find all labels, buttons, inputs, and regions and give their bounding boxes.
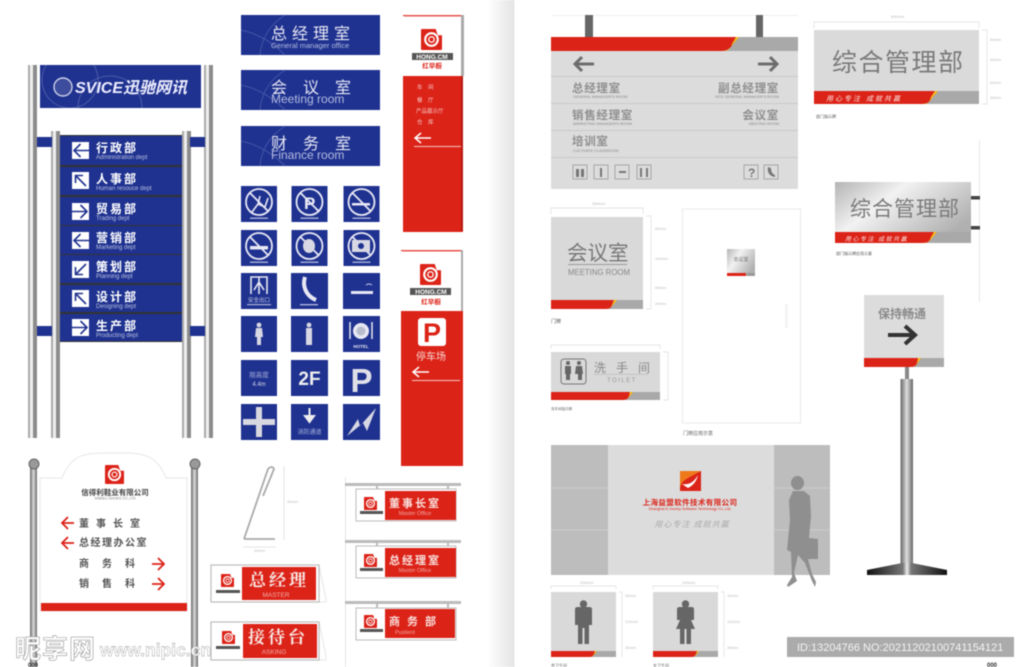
- icon: hotel: [343, 316, 380, 352]
- icon: man: [575, 600, 592, 644]
- band: [551, 300, 643, 309]
- plaque: 会议室: Meeting room: [271, 92, 344, 106]
- logo: [105, 465, 124, 484]
- panel: blue pictogram grid: [241, 186, 380, 440]
- panel: door sign 会议室 with dimensions: MEETING ROOM: [568, 268, 630, 277]
- directory lines: 总经理办公室: [79, 536, 148, 549]
- panel: reception wall: [551, 445, 830, 587]
- panel: table sign 总经理: 总经理: [249, 571, 309, 590]
- panel: toilet sign: 洗手间: [594, 361, 660, 375]
- icon: emergency exit: 安全出口: [248, 296, 270, 304]
- panel: overhead directory sign: ?: [748, 166, 755, 180]
- watermark: image ID label: ID:13204766 NO:20211202100741154121: [797, 642, 1003, 654]
- panel: overhead directory sign: MEETING ROOM: [749, 122, 779, 126]
- directory lines: [79, 517, 148, 590]
- plaque: 财务室: [241, 126, 380, 166]
- totem directory text: 仓 库: [417, 118, 434, 126]
- panel: toilet sign: [551, 345, 668, 411]
- icon: male toilet: [291, 316, 328, 352]
- company name: 上海益盟软件技术有限公司: [643, 497, 737, 507]
- band: [864, 358, 944, 367]
- panel: red totem with directory: HONG.CM: [416, 54, 448, 61]
- arrows: [575, 57, 777, 71]
- plaque: 会议室: 会议室: [271, 79, 367, 97]
- row: 行政部: 行政部: [96, 140, 138, 155]
- icon: no parking: P: [304, 194, 315, 213]
- plaque: 财务室: 财务室: [271, 135, 367, 153]
- row: 贸易部: 贸易部: [96, 201, 138, 216]
- diagram: A-frame table sign profile: [243, 466, 299, 553]
- top banner: SVICE logo: SVICE迅驰网讯: [75, 79, 188, 97]
- company logo: [680, 471, 701, 491]
- silhouette: woman with briefcase: [787, 476, 818, 587]
- arrow: [888, 326, 915, 344]
- panel: male toilet door sign: 30mm: [625, 645, 637, 650]
- panel: door sign 会议室 with dimensions: 20mm: [655, 301, 667, 306]
- panel: male toilet door sign: 110mm: [625, 619, 639, 624]
- row: 策划部: 策划部: [96, 259, 138, 274]
- row: 人事部: Human resouce dept: [96, 186, 152, 192]
- panel: blue directory pylon sign: [28, 52, 213, 438]
- logo: [420, 264, 441, 285]
- panel: overhead directory sign: [551, 15, 798, 189]
- row: 营销部: [60, 226, 182, 254]
- icon: 2F: [291, 360, 328, 396]
- row: 生产部: 生产部: [96, 318, 138, 333]
- plaque: 财务室: Finance room: [271, 148, 344, 162]
- panel: male toilet door sign: 230mm: [580, 580, 594, 585]
- icon: no parking: [292, 186, 328, 222]
- arrow: [413, 367, 429, 377]
- panel: door sign 会议室 with dimensions: [551, 201, 669, 325]
- panel: department sign 综合管理部: 60mm: [990, 57, 1002, 62]
- parking label: 停车场: [416, 350, 446, 363]
- panel: female toilet door sign: 110mm: [727, 619, 741, 624]
- watermark: nipic: 昵享网: [15, 634, 96, 664]
- panel: female toilet door sign: [653, 580, 741, 667]
- directory lines: 董事长室: [79, 517, 147, 530]
- band: [835, 232, 971, 243]
- plaque: 总经理室: [241, 15, 380, 55]
- watermark: nipic: [15, 634, 211, 664]
- panel: metal projecting sign 综合管理部: 部门指示牌应用示意: [836, 250, 872, 256]
- panel: department sign 综合管理部: 用心专注 成就共赢: [826, 95, 902, 103]
- icon: emergency exit: [241, 273, 277, 309]
- hanging sign 董事长室: 董事长室: [389, 496, 441, 510]
- parking icon: [418, 318, 446, 348]
- row: 行政部: Administration dept: [96, 155, 148, 161]
- room labels: [572, 81, 779, 148]
- hanging sign 董事长室: [345, 483, 461, 521]
- panel: floor stand sign 保持畅通: [864, 295, 947, 575]
- panel: metal projecting sign 综合管理部: 用心专注 成就共赢: [845, 235, 908, 243]
- panel: red totem with directory: 红早橱: [422, 61, 442, 70]
- panel: department sign 综合管理部: 600mm: [891, 14, 905, 19]
- icon: height limit: [241, 360, 277, 396]
- icon: no smoking: [241, 230, 277, 266]
- hanging sign 商务部: [345, 601, 461, 640]
- room labels: 副总经理室: [718, 81, 779, 95]
- small metal sign: [727, 249, 755, 276]
- arched panel: [40, 453, 187, 611]
- panel: overhead directory sign: CULTIVATE CLASSROOM: [573, 149, 618, 153]
- hanging sign 总经理室: Master Office: [399, 568, 431, 574]
- icon: female toilet: [241, 316, 277, 352]
- watermark: nipic: www.nipic.cn: [99, 640, 211, 660]
- icon: high voltage bolt: [343, 404, 380, 440]
- panel: red totem with parking: [401, 250, 463, 466]
- panel: blue door plaques: [241, 15, 380, 166]
- row: 设计部: [60, 285, 182, 312]
- icon: hotel: HOTEL: [353, 344, 369, 349]
- panel: door sign 会议室 with dimensions: 会议室: [567, 242, 628, 265]
- band: [551, 392, 660, 400]
- row: 营销部: 营销部: [96, 230, 138, 245]
- top banner: SVICE logo: [39, 64, 202, 109]
- directory rows: [60, 135, 182, 342]
- panel: door sign 会议室 with dimensions: 60mm: [655, 226, 667, 231]
- panel: floor stand sign 保持畅通: 保持畅通: [878, 306, 926, 321]
- hanging sign 董事长室: Master Office: [399, 511, 431, 517]
- totem directory text: 产品展示厅: [416, 107, 444, 115]
- directory lines: 销售科: [79, 577, 148, 590]
- icon: P: [343, 360, 380, 399]
- panel: male toilet door sign: 30mm: [625, 593, 637, 598]
- gutter shadow between the two pages: [487, 0, 514, 667]
- panel: department sign 综合管理部: 部门指示牌: [816, 113, 836, 119]
- panel: department sign 综合管理部: 60mm: [990, 37, 1002, 42]
- panel: female toilet door sign: 30mm: [727, 593, 739, 598]
- icon: fire passage: 消防通道: [297, 428, 322, 436]
- panel: department sign 综合管理部: 综合管理部: [832, 49, 965, 77]
- panel: overhead directory sign: GENERAL MANAGER'S ROOM: [573, 95, 627, 99]
- panel: table sign 总经理: [211, 565, 326, 602]
- icon: P: P: [350, 362, 373, 399]
- icon: smoking area: [343, 273, 380, 309]
- icon: no smoking lighter: [344, 186, 380, 222]
- row: 人事部: [60, 167, 182, 195]
- panel: toilet sign: 洗手间指示牌: [551, 406, 572, 411]
- icon: telephone: [291, 273, 328, 309]
- panel: hanging red door signs: [345, 477, 461, 667]
- room labels: 会议室: [742, 108, 779, 122]
- panel: white arched directory sign: [29, 453, 200, 667]
- slogan: 用心专注 成就共赢: [654, 520, 731, 529]
- room labels: 销售经理室: [572, 108, 633, 122]
- band: [551, 37, 798, 51]
- logo: [421, 29, 442, 50]
- plaque: 总经理室: 总经理室: [271, 25, 355, 43]
- panel: metal projecting sign 综合管理部: 综合管理部: [850, 198, 960, 221]
- red arrows: [62, 517, 164, 590]
- icon: fire passage: [291, 404, 328, 440]
- panel: female toilet door sign: 230mm: [682, 580, 696, 585]
- panel: door sign 会议室 with dimensions: 110mm: [655, 256, 669, 261]
- row: 人事部: 人事部: [96, 171, 138, 186]
- plaque: 会议室: [241, 70, 380, 110]
- room labels: 培训室: [572, 134, 609, 148]
- panel: table sign 接待台: [211, 622, 326, 660]
- panel: overhead directory sign: VICE GENERAL MANAGER'S ROOM: [715, 95, 779, 99]
- row: 贸易部: [60, 197, 182, 225]
- panel: door application diagram: [682, 209, 800, 437]
- icon: height limit: 限高度: [249, 370, 269, 379]
- plaque: 总经理室: General manager office: [271, 41, 349, 50]
- hanging sign 总经理室: [345, 540, 461, 578]
- row: 设计部: 设计部: [96, 289, 138, 304]
- panel: department sign 综合管理部: 60mm: [990, 80, 1002, 85]
- watermark: image ID label: [787, 637, 1014, 657]
- panel: red totem with parking: HONG.CM: [415, 289, 447, 296]
- totem directory text: 车 间: [417, 83, 434, 91]
- panel: metal projecting sign 综合管理部: [835, 140, 980, 302]
- panel: department sign 综合管理部: 30mm: [990, 95, 1002, 100]
- panel: door sign 会议室 with dimensions: 60mm: [655, 285, 667, 290]
- panel: male toilet door sign: [551, 580, 639, 667]
- panel: overhead directory sign: MARKETING MANAGER'S ROOM: [573, 122, 632, 126]
- icon: height limit: 4.4m: [252, 382, 266, 388]
- row: 贸易部: Trading dept: [96, 216, 130, 222]
- panel: table sign 总经理: MASTER: [262, 592, 290, 599]
- panel: door application diagram: 门牌应用示意: [683, 430, 713, 437]
- hanging sign 商务部: Pustient: [395, 630, 415, 636]
- panel: door sign 会议室 with dimensions: 门牌: [551, 318, 561, 325]
- panel: red totem with parking: 红早橱: [421, 297, 441, 306]
- room labels: 总经理室: [572, 81, 621, 95]
- posts: [29, 459, 200, 667]
- row: 营销部: Marketing dept: [96, 245, 136, 251]
- small pictograms: [573, 165, 778, 179]
- row: 策划部: [60, 255, 182, 283]
- panel: table sign 接待台: 接待台: [248, 627, 308, 647]
- totem directory text: 餐 厅: [417, 96, 434, 104]
- row: 生产部: Producting dept: [96, 333, 138, 339]
- panel: door sign 会议室 with dimensions: 350mm: [592, 201, 606, 206]
- red strip: [41, 603, 187, 611]
- panel: white arched directory sign: XINDELI SHOES CO.,LTD: [94, 496, 136, 500]
- panel: red totem with directory: [403, 15, 464, 232]
- band: [814, 91, 979, 104]
- panel: toilet sign: TOILET: [607, 378, 637, 384]
- hanging sign 总经理室: 总经理室: [389, 553, 441, 567]
- icon: toilet pictogram: [561, 359, 586, 384]
- totem directory text: [416, 83, 444, 126]
- panel: reception wall: Shanghai E-money Software Technology Co.,Ltd.: [649, 507, 731, 511]
- diagram: A-frame table sign profile: 30mm: [254, 548, 266, 553]
- small metal sign: 会议室: [733, 256, 749, 263]
- panel: table sign 接待台: ASKING: [262, 649, 286, 656]
- directory lines: 商务科: [79, 557, 148, 570]
- outer and inner metal posts: [28, 65, 213, 438]
- row: 生产部: [60, 314, 182, 341]
- panel: department sign 综合管理部: [814, 14, 1002, 119]
- parking icon: P: [423, 318, 441, 348]
- panel: female toilet door sign: 30mm: [727, 645, 739, 650]
- diagram: A-frame table sign profile: 90mm: [287, 499, 299, 504]
- row: 设计部: Designing dept: [96, 304, 136, 310]
- row: 策划部: Planning dept: [96, 274, 133, 280]
- icon: woman: [676, 600, 695, 644]
- icon: no photography: [344, 230, 380, 266]
- stand pole and base: [867, 367, 947, 575]
- icon: 2F: 2F: [298, 369, 321, 390]
- icon: no running: [241, 186, 277, 222]
- hanging sign 商务部: 商务部: [389, 614, 443, 628]
- row: 行政部: [60, 136, 182, 165]
- icon: no talking: [292, 230, 328, 266]
- company name: 信得利鞋业有限公司: [81, 487, 149, 497]
- arrow: [415, 133, 431, 143]
- icon: plus: [241, 404, 277, 440]
